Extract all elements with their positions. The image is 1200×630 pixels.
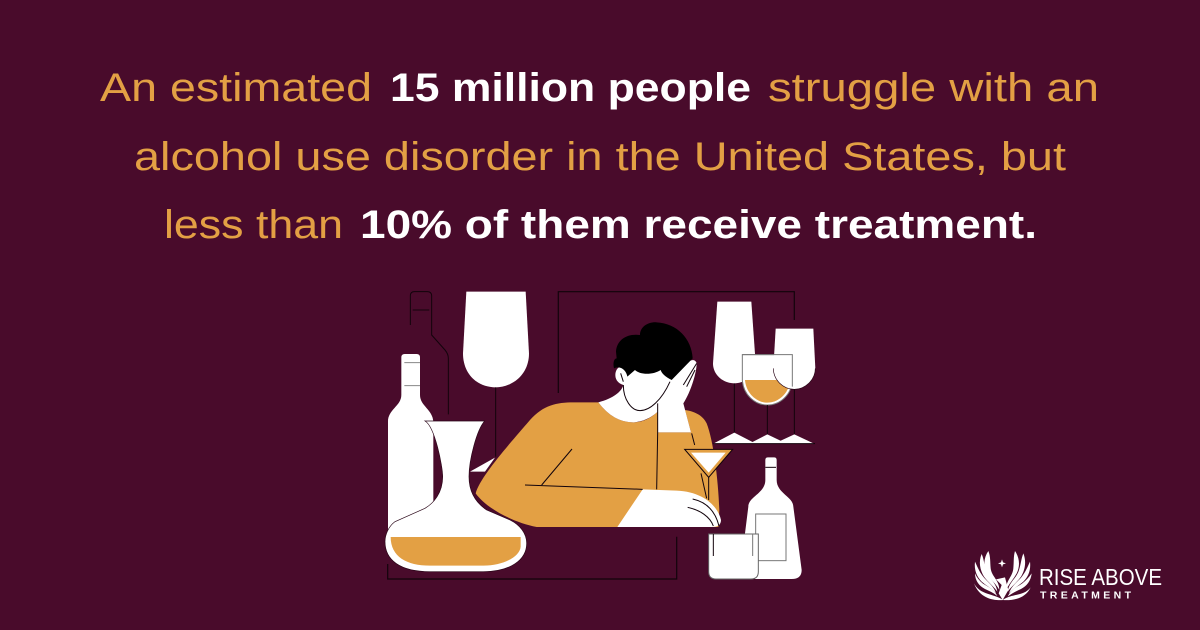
neck, face, hand [598, 360, 697, 432]
icon: short bottle [745, 457, 802, 579]
ear [615, 366, 626, 385]
icon: three wine glasses on shelf [713, 302, 815, 444]
line details [525, 363, 719, 526]
title: 15 million people [390, 66, 751, 110]
logo icon: wings [974, 551, 1032, 600]
left objects [385, 292, 529, 572]
icon: white bottle [388, 354, 433, 533]
logo tagline: TREATMENT [1040, 589, 1132, 601]
decanter liquid [391, 537, 521, 566]
icon: outlined back bottle [410, 292, 448, 414]
title: An estimated [100, 66, 372, 110]
frame lines [388, 292, 794, 579]
logo: Rise Above Treatment [974, 551, 1162, 601]
sweater [476, 402, 719, 527]
icon: large wine glass [463, 292, 529, 472]
title [100, 66, 1099, 247]
title: alcohol use disorder in the United States, but [134, 135, 1066, 179]
title: struggle with an [768, 66, 1099, 110]
title: less than [164, 203, 343, 247]
title: 10% of them receive treatment. [360, 203, 1037, 247]
icon: martini glass [685, 449, 733, 500]
person [476, 322, 721, 527]
icon: tumbler [709, 534, 758, 579]
logo name: RISE ABOVE [1039, 564, 1162, 590]
illustration: person drinking alone among bottles and glasses [385, 292, 815, 579]
right objects and person [476, 302, 815, 579]
hair [613, 322, 693, 380]
icon: decanter [385, 421, 527, 572]
forearm [617, 489, 721, 527]
